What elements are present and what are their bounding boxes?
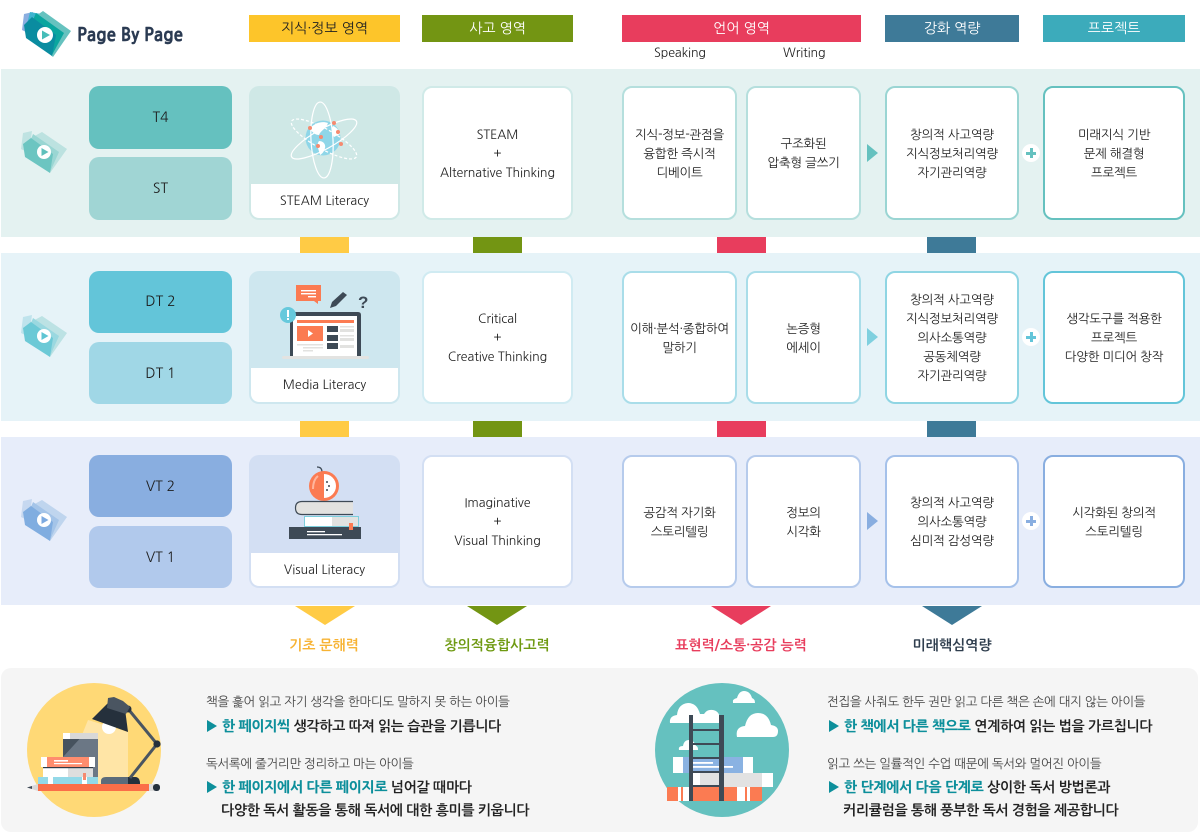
box: row 3 project — [1043, 455, 1185, 588]
box: row 3 thinking: Imaginative — [464, 496, 531, 509]
card: STEAM Literacy: STEAM Literacy — [280, 194, 369, 207]
text block: left notes: 한 페이지씩 생각하고 따져 읽는 습관을 기릅니다 — [222, 720, 501, 734]
level: ST: ST — [153, 182, 168, 196]
box: row 1 speaking: 융합한 즉시적 — [643, 146, 716, 160]
box: row 3 competency: 의사소통역량 — [917, 515, 986, 528]
level: DT 2: DT 2 — [145, 295, 176, 309]
box: row 3 speaking — [622, 455, 737, 588]
level: T4: T4 — [152, 110, 169, 124]
outcome label: basic literacy: 기초 문해력 — [289, 639, 359, 653]
box: row 2 project: 생각도구를 적용한 — [1066, 312, 1162, 325]
text block: left notes: 다양한 독서 활동을 통해 독서에 대한 흥미를 키웁니다 — [221, 804, 529, 818]
box: row 3 writing: 시각화 — [786, 524, 821, 538]
header: project: 프로젝트 — [1088, 22, 1140, 36]
box: row 2 thinking: Critical — [478, 312, 517, 325]
text block: left notes: 독서록에 줄거리만 정리하고 마는 아이들 — [206, 757, 413, 770]
box: row 2 competency: 자기관리역량 — [917, 369, 986, 382]
card: Visual Literacy — [249, 455, 400, 588]
outcome label: creative thinking: 창의적융합사고력 — [444, 639, 550, 653]
text block: right notes: 커리큘럼을 통해 풍부한 독서 경험을 제공합니다 — [843, 804, 1118, 818]
box: row 2 speaking: 이해·분석·종합하여 — [630, 322, 729, 334]
logo: Page By Page — [77, 26, 183, 44]
box: row 2 project: 다양한 미디어 창작 — [1065, 350, 1163, 363]
card: Visual Literacy: Visual Literacy — [284, 563, 365, 576]
connectors between row 1 and row 2 — [300, 237, 976, 253]
header: reinforcement competency — [885, 15, 1019, 42]
box: row 2 thinking — [422, 271, 573, 404]
icon: laptop with speech bubble and pencil: ? — [358, 293, 368, 312]
box: row 2 writing: 논증형 — [786, 322, 821, 334]
box: row 2 competency: 공동체역량 — [923, 350, 981, 363]
icon: row 1 book — [21, 131, 67, 173]
box: row 3 speaking: 공감적 자기화 — [643, 506, 716, 518]
text block: right notes: 전집을 사줘도 한두 권만 읽고 다른 책은 손에 대지 않는 아이들 — [827, 695, 1145, 708]
box: row 2 project — [1043, 271, 1185, 404]
header: knowledge area — [249, 15, 400, 42]
box: row 1 thinking: Alternative Thinking — [440, 166, 555, 178]
box: row 1 thinking: STEAM — [477, 128, 518, 140]
box: row 2 writing — [746, 271, 861, 404]
box: row 1 project: 미래지식 기반 — [1078, 128, 1150, 140]
plus: row 3 — [1022, 512, 1040, 530]
level: T4 — [89, 86, 232, 149]
box: row 1 writing: 구조화된 — [780, 137, 826, 150]
level: DT 1: DT 1 — [145, 366, 176, 380]
header: thinking area — [422, 15, 573, 42]
panel: DT band — [1, 253, 1200, 421]
arrow: row 3 — [867, 512, 878, 530]
level: VT 2 — [89, 455, 232, 517]
box: row 1 competency: 창의적 사고역량 — [910, 128, 994, 140]
box: row 2 thinking: + — [493, 331, 502, 344]
card: Media Literacy — [249, 271, 400, 404]
box: row 1 speaking: 지식-정보-관점을 — [635, 128, 724, 140]
arrow: red down — [711, 606, 771, 625]
box: row 3 project: 스토리텔링 — [1085, 524, 1143, 538]
card: Media Literacy: Media Literacy — [283, 378, 366, 391]
box: row 1 writing — [746, 86, 861, 220]
box: row 1 speaking: 디베이트 — [656, 166, 702, 178]
text block: right notes — [827, 695, 1152, 818]
arrow: yellow down — [295, 606, 355, 625]
box: row 3 speaking: 스토리텔링 — [651, 524, 708, 538]
box: row 2 project: 프로젝트 — [1091, 331, 1137, 344]
outcome label: expression: 표현력/소통·공감 능력 — [675, 639, 807, 653]
connectors between row 2 and row 3 — [300, 421, 976, 437]
icon: apple on books — [289, 466, 361, 539]
box: row 1 competency — [885, 86, 1019, 220]
box: row 2 competency — [885, 271, 1019, 404]
header: language area: 언어 영역 — [713, 22, 770, 36]
icon: globe with orbits — [290, 102, 358, 178]
text block: left notes — [206, 695, 530, 818]
outcome label: core competency: 미래핵심역량 — [913, 639, 991, 653]
text block: right notes: 한 단계에서 다음 단계로 상이한 독서 방법론과 — [844, 781, 1110, 795]
plus: row 2 — [1022, 328, 1040, 346]
level: VT 1: VT 1 — [146, 550, 175, 564]
arrow: olive down — [467, 606, 527, 625]
label: writing: Writing — [783, 46, 825, 59]
label: speaking: Speaking — [654, 46, 706, 59]
header: project — [1043, 15, 1185, 42]
box: row 2 writing: 에세이 — [786, 340, 821, 354]
level: VT 2: VT 2 — [146, 480, 175, 494]
box: row 3 thinking: + — [493, 515, 502, 528]
illustration: desk lamp and books — [27, 683, 161, 817]
box: row 2 competency: 지식정보처리역량 — [906, 312, 998, 325]
icon: laptop with speech bubble and pencil — [280, 285, 369, 359]
text block: right notes: 읽고 쓰는 일률적인 수업 때문에 독서와 멀어진 아이들 — [827, 757, 1101, 770]
box: row 1 competency: 자기관리역량 — [917, 166, 986, 178]
level: DT 2 — [89, 271, 232, 333]
box: row 1 thinking — [422, 86, 573, 220]
card: STEAM Literacy — [249, 86, 400, 220]
level: VT 1 — [89, 526, 232, 588]
box: row 1 writing: 압축형 글쓰기 — [767, 156, 840, 169]
arrow: row 1 — [867, 144, 878, 162]
box: row 1 competency: 지식정보처리역량 — [906, 146, 998, 160]
logo — [22, 11, 183, 57]
box: row 3 writing — [746, 455, 861, 588]
header: knowledge area: 지식·정보 영역 — [281, 22, 368, 36]
text block: right notes: 한 책에서 다른 책으로 연계하여 읽는 법을 가르칩니다 — [844, 720, 1152, 734]
box: row 2 competency: 의사소통역량 — [917, 331, 986, 344]
text block: left notes: 한 페이지에서 다른 페이지로 넘어갈 때마다 — [222, 781, 472, 795]
arrow: blue down — [922, 606, 982, 625]
box: row 2 competency: 창의적 사고역량 — [910, 293, 994, 306]
plus: row 1 — [1022, 144, 1040, 162]
box: row 3 competency — [885, 455, 1019, 588]
icon: row 3 book — [21, 499, 67, 541]
illustration: ladder and books — [655, 683, 789, 817]
box: row 3 project: 시각화된 창의적 — [1072, 506, 1156, 518]
panel: bottom notes — [1, 668, 1198, 832]
box: row 1 project: 프로젝트 — [1091, 166, 1137, 178]
box: row 1 speaking — [622, 86, 737, 220]
header: thinking area: 사고 영역 — [469, 22, 526, 36]
box: row 1 project: 문제 해결형 — [1084, 146, 1144, 160]
panel: VT band — [1, 437, 1200, 605]
text block: left notes: 책을 훑어 읽고 자기 생각을 한마디도 말하지 못 하는 아이들 — [206, 695, 510, 708]
box: row 3 competency: 심미적 감성역량 — [910, 534, 994, 547]
box: row 3 thinking — [422, 455, 573, 588]
header: language area — [622, 15, 861, 42]
box: row 3 thinking: Visual Thinking — [454, 534, 541, 547]
box: row 1 thinking: + — [493, 146, 502, 160]
box: row 2 speaking — [622, 271, 737, 404]
header: reinforcement competency: 강화 역량 — [924, 22, 980, 36]
panel: T band — [1, 69, 1200, 237]
level: DT 1 — [89, 342, 232, 404]
box: row 3 competency: 창의적 사고역량 — [910, 496, 994, 509]
box: row 2 thinking: Creative Thinking — [448, 350, 547, 363]
level: ST — [89, 157, 232, 220]
box: row 3 writing: 정보의 — [786, 506, 821, 518]
arrow: row 2 — [867, 328, 878, 346]
icon: row 2 book — [21, 315, 67, 357]
box: row 1 project — [1043, 86, 1185, 220]
box: row 2 speaking: 말하기 — [662, 340, 697, 354]
